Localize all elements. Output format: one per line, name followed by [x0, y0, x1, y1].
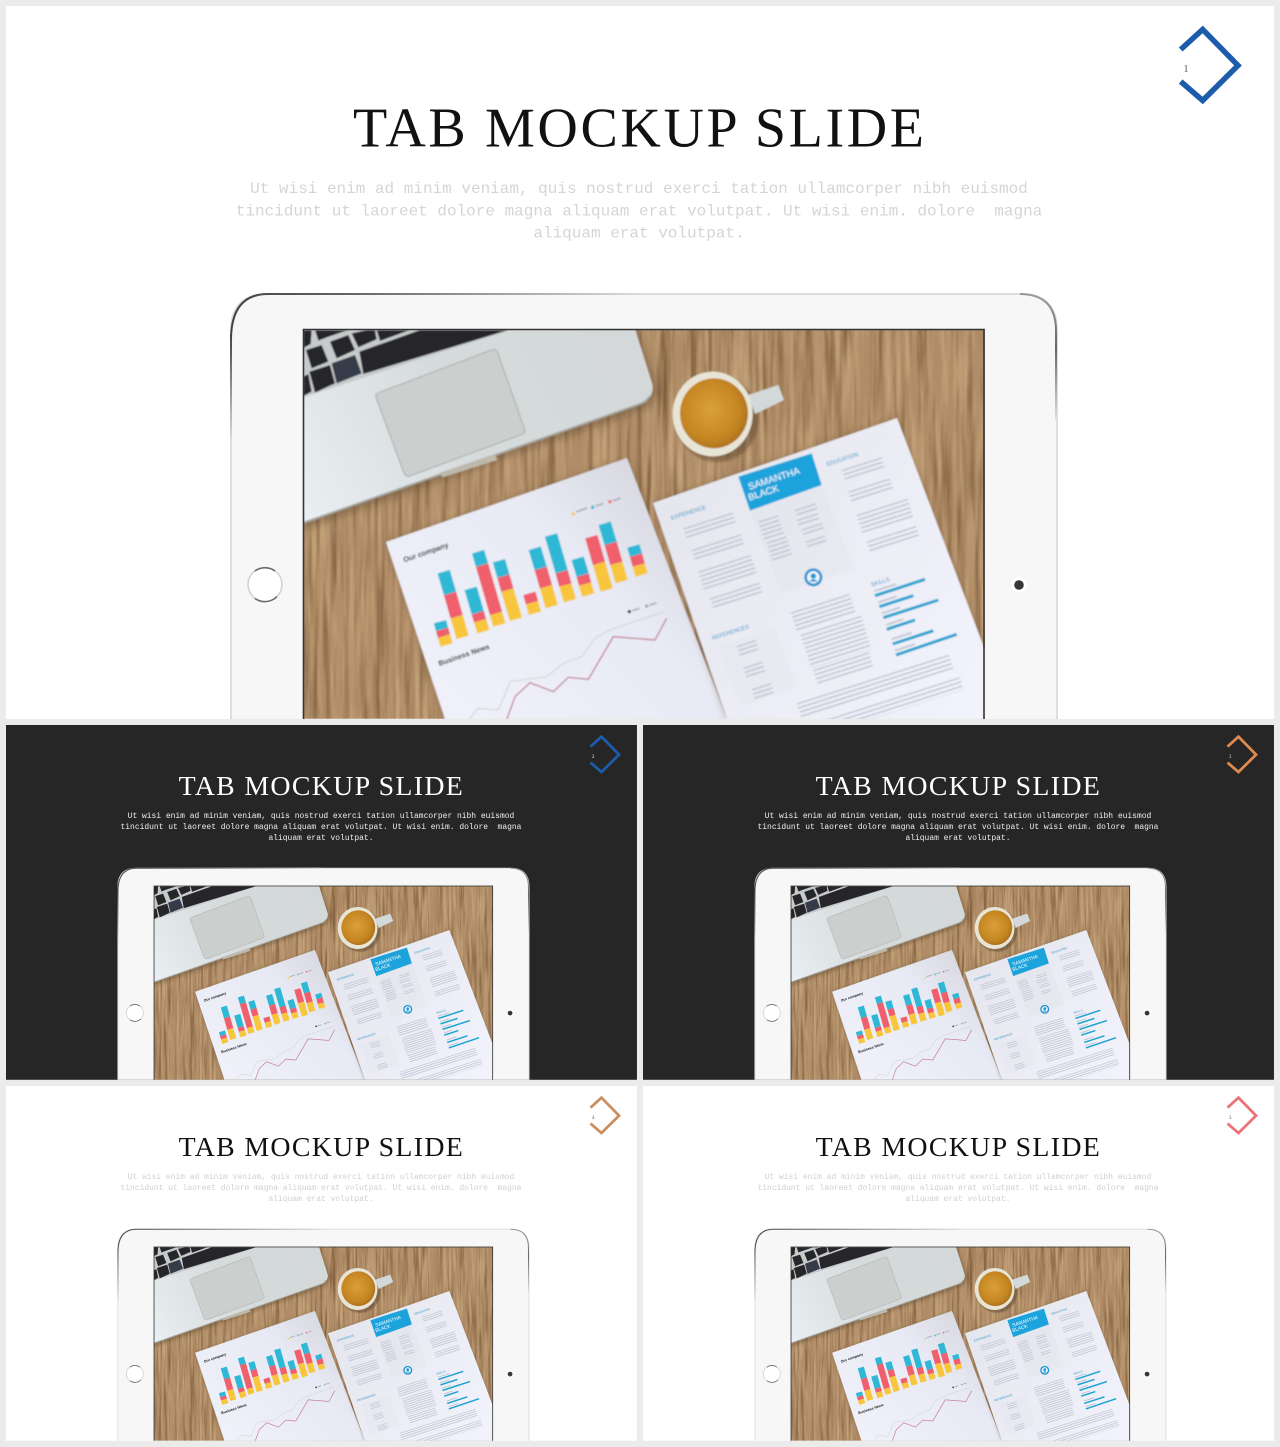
body text: tincidunt ut laoreet dolore magna aliquam erat volutpat. Ut wisi enim. dolore magna — [758, 823, 1159, 832]
paper: resume: SAMANTHA — [747, 466, 802, 493]
tablet mockup — [231, 294, 1057, 734]
coffee cup — [673, 372, 784, 462]
body text: Ut wisi enim ad minim veniam, quis nostrud exerci tation ullamcorper nibh euismod — [765, 812, 1151, 821]
paper: resume — [653, 418, 990, 734]
icon: tan diamond number 4: 4 — [592, 1116, 595, 1121]
body text: tincidunt ut laoreet dolore magna aliquam erat volutpat. Ut wisi enim. dolore magna — [121, 823, 522, 832]
body text — [121, 812, 522, 843]
screen border — [304, 330, 984, 719]
wood desk — [303, 329, 985, 719]
title: TAB MOCKUP SLIDE — [816, 771, 1100, 802]
body text: Ut wisi enim ad minim veniam, quis nostrud exerci tation ullamcorper nibh euismod — [765, 1173, 1151, 1182]
home button — [248, 568, 282, 602]
panel: dark slide 3 — [643, 725, 1274, 1087]
title: TAB MOCKUP SLIDE — [179, 771, 463, 802]
laptop — [303, 329, 660, 530]
body text: Ut wisi enim ad minim veniam, quis nostrud exerci tation ullamcorper nibh euismod — [128, 1173, 514, 1182]
body text: aliquam erat volutpat. — [268, 1195, 373, 1204]
body text: Ut wisi enim ad minim veniam, quis nostrud exerci tation ullamcorper nibh euismod — [250, 180, 1028, 198]
icon: blue diamond number 1 — [1181, 30, 1238, 100]
body text — [758, 1173, 1159, 1204]
body text: aliquam erat volutpat. — [268, 834, 373, 843]
tablet body — [231, 294, 1057, 719]
body text — [121, 1173, 522, 1204]
icon: pink diamond number 3: 3 — [1229, 1116, 1232, 1121]
body text — [758, 812, 1159, 843]
body text: tincidunt ut laoreet dolore magna aliquam erat volutpat. Ut wisi enim. dolore magna — [758, 1184, 1159, 1193]
panel: dark slide 2 — [6, 725, 637, 1087]
camera — [1012, 578, 1026, 592]
title: TAB MOCKUP SLIDE — [816, 1132, 1100, 1163]
paper: resume: REFERENCES — [711, 624, 750, 642]
body text: tincidunt ut laoreet dolore magna aliquam erat volutpat. Ut wisi enim. dolore magna — [236, 202, 1043, 220]
panel: light slide 5 — [643, 1086, 1274, 1447]
panel: main slide 1 — [6, 6, 1274, 734]
paper: bar and line chart: Business News — [437, 642, 491, 668]
body text: tincidunt ut laoreet dolore magna aliquam erat volutpat. Ut wisi enim. dolore magna — [121, 1184, 522, 1193]
tablet mockup — [118, 868, 529, 1087]
slide 4 background — [6, 1086, 637, 1441]
icon: blue diamond number 2 — [591, 737, 619, 772]
body text: aliquam erat volutpat. — [905, 834, 1010, 843]
body text: Ut wisi enim ad minim veniam, quis nostrud exerci tation ullamcorper nibh euismod — [128, 812, 514, 821]
body text: aliquam erat volutpat. — [905, 1195, 1010, 1204]
photo on tablet screen — [303, 329, 990, 734]
paper: resume: EXPERIENCE — [670, 505, 707, 522]
paper: bar and line chart — [386, 458, 727, 720]
tablet mockup — [118, 1229, 529, 1447]
body text — [236, 180, 1043, 242]
title: TAB MOCKUP SLIDE — [179, 1132, 463, 1163]
icon: orange diamond number 3: 3 — [1229, 755, 1232, 760]
tablet mockup — [755, 868, 1166, 1087]
slide 2 background — [6, 725, 637, 1080]
panel: light slide 4 — [6, 1086, 637, 1447]
body text: aliquam erat volutpat. — [533, 224, 745, 242]
title: TAB MOCKUP SLIDE — [353, 98, 924, 160]
paper: resume: SKILLS — [870, 577, 891, 589]
slide 3 background — [643, 725, 1274, 1080]
tablet edge highlights — [231, 294, 1056, 440]
icon: orange diamond number 3 — [1228, 737, 1256, 772]
slide 5 background — [643, 1086, 1274, 1441]
icon: blue diamond number 1: 1 — [1184, 64, 1188, 75]
paper: bar and line chart: Our company — [402, 540, 451, 564]
icon: pink diamond number 3 — [1228, 1098, 1256, 1133]
paper: resume: EDUCATION — [826, 452, 859, 468]
tablet mockup — [755, 1229, 1166, 1447]
icon: blue diamond number 2: 2 — [592, 755, 595, 760]
paper: resume: BLACK — [747, 483, 781, 504]
icon: tan diamond number 4 — [591, 1098, 619, 1133]
slide 1 background — [6, 6, 1274, 719]
